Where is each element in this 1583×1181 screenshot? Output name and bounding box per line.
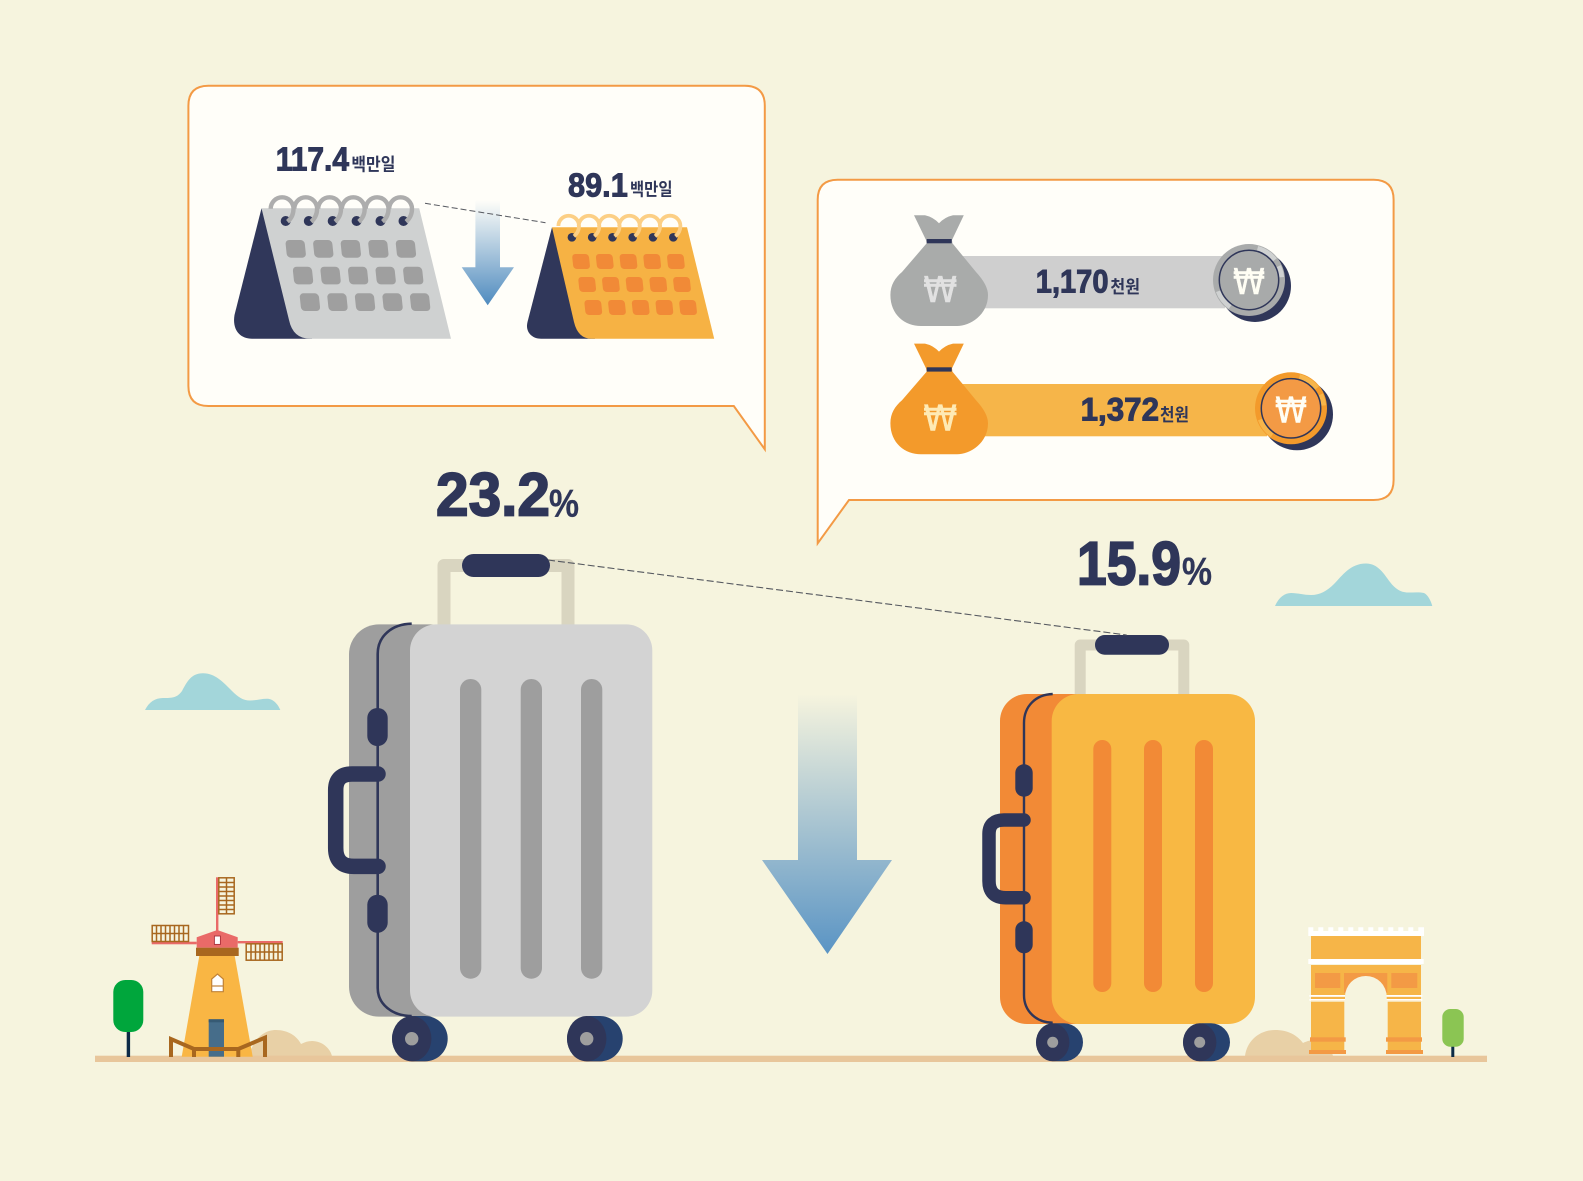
small down arrow [462, 200, 514, 305]
suitcase: silver, larger [336, 554, 652, 1061]
dashed connector between suitcases [548, 560, 1127, 635]
money bag: grey: ₩ [923, 270, 957, 311]
ground line [95, 1056, 1487, 1062]
tree: light green right [1442, 1009, 1464, 1057]
label: 1,170: 천원 [1110, 277, 1140, 297]
bar: 1,170 [950, 256, 1225, 308]
figure: 15.9%: 15.9 [1077, 530, 1181, 598]
cloud: right [1275, 564, 1432, 606]
figure: 23.2%: 23.2 [436, 460, 550, 528]
label: 117.4: 백만일 [351, 154, 395, 174]
figure: 15.9%: % [1182, 550, 1212, 594]
money bag: orange [890, 344, 988, 454]
dashed connector between calendars [425, 203, 546, 223]
label: 117.4: 117.4 [276, 140, 350, 178]
bar: 1,372 [950, 384, 1267, 436]
speech bubble: travel days [188, 86, 765, 449]
calendar: grey [234, 197, 451, 339]
tree: green left [113, 980, 143, 1057]
suitcase: orange, smaller [989, 635, 1255, 1061]
label: 89.1 [568, 166, 672, 203]
money bag: grey [890, 215, 988, 326]
label: 1,372: 1,372 [1081, 392, 1159, 428]
calendar: orange [527, 216, 714, 339]
speech bubble: spending per trip [818, 180, 1394, 543]
coin: grey: ₩ [1233, 262, 1265, 303]
label: 89.1: 89.1 [568, 166, 628, 203]
cloud: left [145, 673, 280, 710]
coin: grey [1213, 244, 1291, 322]
label: 1,372: 천원 [1160, 405, 1189, 425]
label: 1,170: 1,170 [1036, 264, 1108, 300]
label: 89.1: 백만일 [630, 180, 672, 200]
arc de triomphe [1308, 927, 1424, 1055]
mounds behind landmarks [249, 1030, 1333, 1056]
money bag: orange: ₩ [923, 398, 957, 439]
coin: orange: ₩ [1275, 390, 1307, 431]
label: 117.4 [276, 140, 395, 178]
coin: orange [1255, 372, 1333, 450]
figure: 23.2%: % [549, 482, 579, 526]
big down arrow [762, 694, 892, 954]
windmill [152, 877, 283, 1057]
